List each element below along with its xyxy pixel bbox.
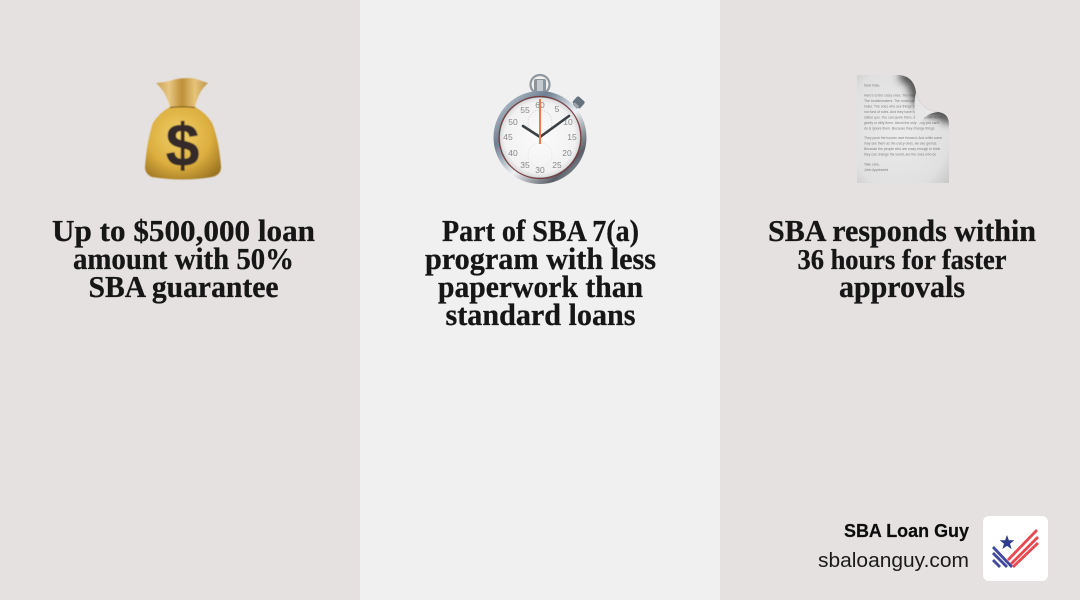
icon: document: status quo. You can quote them, disagree with them, xyxy=(864,116,943,120)
icon: money bag: $ xyxy=(166,112,199,179)
heading: SBA 7(a) program xyxy=(425,213,656,332)
icon: document: they can change the world, are the ones who do. xyxy=(864,152,937,156)
heading: loan amount: Up to $500,000 loan xyxy=(52,213,315,248)
icon: stopwatch: 40 xyxy=(508,148,518,158)
icon: document: The troublemakers. The round pegs in the xyxy=(864,99,927,103)
icon: stopwatch: 5 xyxy=(555,104,560,114)
icon: stopwatch xyxy=(494,75,586,184)
heading: SBA 7(a) program: Part of SBA 7(a) xyxy=(442,213,639,248)
heading: fast response: approvals xyxy=(839,269,965,304)
icon: stopwatch: 60 xyxy=(535,100,545,110)
icon: document: not fond of rules. And they have no respect for the xyxy=(864,110,939,114)
icon: stopwatch: 35 xyxy=(520,160,530,170)
heading: fast response xyxy=(768,213,1036,304)
icon: document: do is ignore them. Because they change things. xyxy=(864,126,935,130)
heading: fast response: SBA responds within xyxy=(768,213,1036,248)
icon: stopwatch: 10 xyxy=(563,117,573,127)
panel: loan amount xyxy=(0,0,360,600)
heading: loan amount xyxy=(52,213,315,304)
heading: loan amount: amount with 50% xyxy=(73,241,294,276)
icon: document: Here's to the crazy ones. The misfits. The rebels. xyxy=(864,94,938,98)
icon: document: John Appleseed xyxy=(864,168,888,172)
icon: stopwatch: 20 xyxy=(562,148,572,158)
icon: document: holes. The ones who see things differently. They're xyxy=(864,104,940,108)
icon: document: may see them as the crazy ones, we see genius. xyxy=(864,142,937,146)
footer: brand name: SBA Loan Guy xyxy=(844,520,970,541)
icon: document: Dear Kate, xyxy=(864,84,880,88)
icon: stopwatch: 30 xyxy=(535,165,545,175)
heading: fast response: 36 hours for faster xyxy=(798,244,1007,276)
icon: stopwatch: 55 xyxy=(520,105,530,115)
icon: document: Because the people who are crazy enough to think xyxy=(864,147,940,151)
icon: document: Take care, xyxy=(864,162,880,166)
icon: document: They push the human race forward. And while some xyxy=(864,136,942,140)
icon: stopwatch: 45 xyxy=(503,132,513,142)
icon: document xyxy=(857,75,949,183)
icon: stopwatch: 50 xyxy=(508,117,518,127)
heading: loan amount: SBA guarantee xyxy=(88,269,278,304)
icon: stopwatch: 15 xyxy=(567,132,577,142)
logo: star and stripes checkmark xyxy=(983,516,1048,581)
panel: SBA 7(a) program xyxy=(360,0,720,600)
icon: stopwatch: 25 xyxy=(552,160,562,170)
icon: document: glorify or vilify them. About the only thing you can't xyxy=(864,121,939,125)
panel: fast response xyxy=(769,75,1036,304)
footer: website: sbaloanguy.com xyxy=(818,550,969,572)
heading: SBA 7(a) program: program with less xyxy=(425,241,656,276)
heading: SBA 7(a) program: paperwork than xyxy=(438,269,643,304)
heading: SBA 7(a) program: standard loans xyxy=(446,297,636,332)
icon: money bag xyxy=(145,78,221,180)
